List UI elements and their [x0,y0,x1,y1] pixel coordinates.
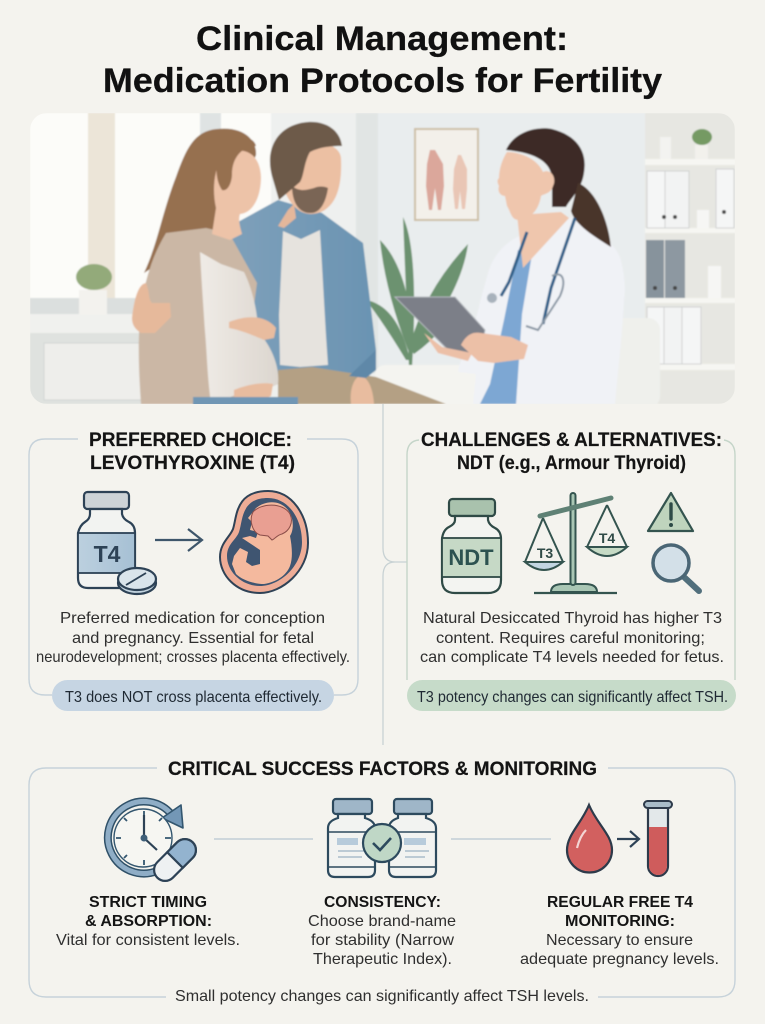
title: Clinical Management: [196,20,568,58]
body text: content. Requires careful monitoring; [436,630,705,647]
woman: body [139,228,259,404]
icon: fetus with brain [220,491,308,593]
body text: can complicate T4 levels needed for fetus. [420,649,724,666]
window [30,113,280,303]
heading: critical success factors: CRITICAL SUCCESS FACTORS & MONITORING [168,759,597,780]
arrow [155,529,202,551]
factor text: strict timing: STRICT TIMING [89,894,207,911]
heading: preferred choice: LEVOTHYROXINE (T4) [90,453,295,474]
title [103,20,662,100]
factor text: strict timing: & ABSORPTION: [85,913,212,930]
factor text: strict timing: Vital for consistent levels. [56,932,240,949]
icon: two bottles with check [328,799,436,877]
heading: challenges [421,430,722,474]
factor text: strict timing [56,894,240,949]
callout: T3 placenta: T3 does NOT cross placenta effectively. [65,689,322,706]
body text: and pregnancy. Essential for fetal [72,630,314,647]
tablet [395,297,485,353]
man: hand around woman [132,283,171,333]
icon: warning triangle [648,493,693,531]
photo: couple consulting a doctor [30,113,735,410]
shelves [645,113,735,404]
factor text: free T4 monitoring: Necessary to ensure [546,932,693,949]
man: trousers [278,367,446,404]
footer note: Small potency changes can significantly affect TSH levels. [175,988,589,1005]
factor text: consistency: Therapeutic Index). [313,951,452,968]
factor text: free T4 monitoring: adequate pregnancy levels. [520,951,719,968]
icon: balance scale T3 T4 [525,493,627,593]
panel: challenges and alternatives [407,430,736,711]
sofa [376,364,515,404]
body text [36,610,350,666]
man: hand on knee [351,376,374,404]
heading: preferred choice [89,430,295,474]
factor text: free T4 monitoring [520,894,719,968]
icon: NDT bottle: NDT [448,545,494,570]
title: Medication Protocols for Fertility [103,62,662,100]
icon: magnifier [653,545,699,591]
factor text: consistency: Choose brand-name [308,913,456,930]
factor text: free T4 monitoring: MONITORING: [565,913,675,930]
panel: preferred choice levothyroxine [29,430,358,711]
window plant [76,264,112,290]
heading: challenges: NDT (e.g., Armour Thyroid) [457,453,686,474]
factor text: consistency: for stability (Narrow [311,932,454,949]
factor text: consistency: CONSISTENCY: [324,894,441,911]
icon: blood drop to test tube [567,801,672,876]
callout: T3 potency: T3 potency changes can significantly affect TSH. [417,689,728,706]
poster [415,129,478,220]
body text: neurodevelopment; crosses placenta effectively. [36,649,350,666]
body text: Preferred medication for conception [60,610,325,627]
body text: Natural Desiccated Thyroid has higher T3 [423,610,722,627]
heading: preferred choice: PREFERRED CHOICE: [89,430,292,451]
panel: critical success factors [29,759,735,1005]
connector between panels [383,404,407,745]
man: shirt [227,200,376,380]
icon: balance scale T3 T4: T3 [537,545,553,561]
man: head [286,145,342,215]
body text [420,610,724,666]
floor plant [366,217,468,367]
icon: T4 bottle with tablet: T4 [94,541,121,567]
icon: balance scale T3 T4: T4 [599,530,615,546]
icon: clock with capsule [108,801,200,885]
callout: T3 potency [407,680,736,711]
factor text: free T4 monitoring: REGULAR FREE T4 [547,894,693,911]
icon: NDT bottle [442,499,501,593]
back wall [356,113,645,373]
heading: challenges: CHALLENGES & ALTERNATIVES: [421,430,722,451]
factor text: consistency [308,894,456,968]
callout: T3 placenta [52,680,334,711]
doctor [612,318,622,402]
icon: T4 bottle with tablet [78,492,156,594]
woman: hair back [144,129,256,273]
